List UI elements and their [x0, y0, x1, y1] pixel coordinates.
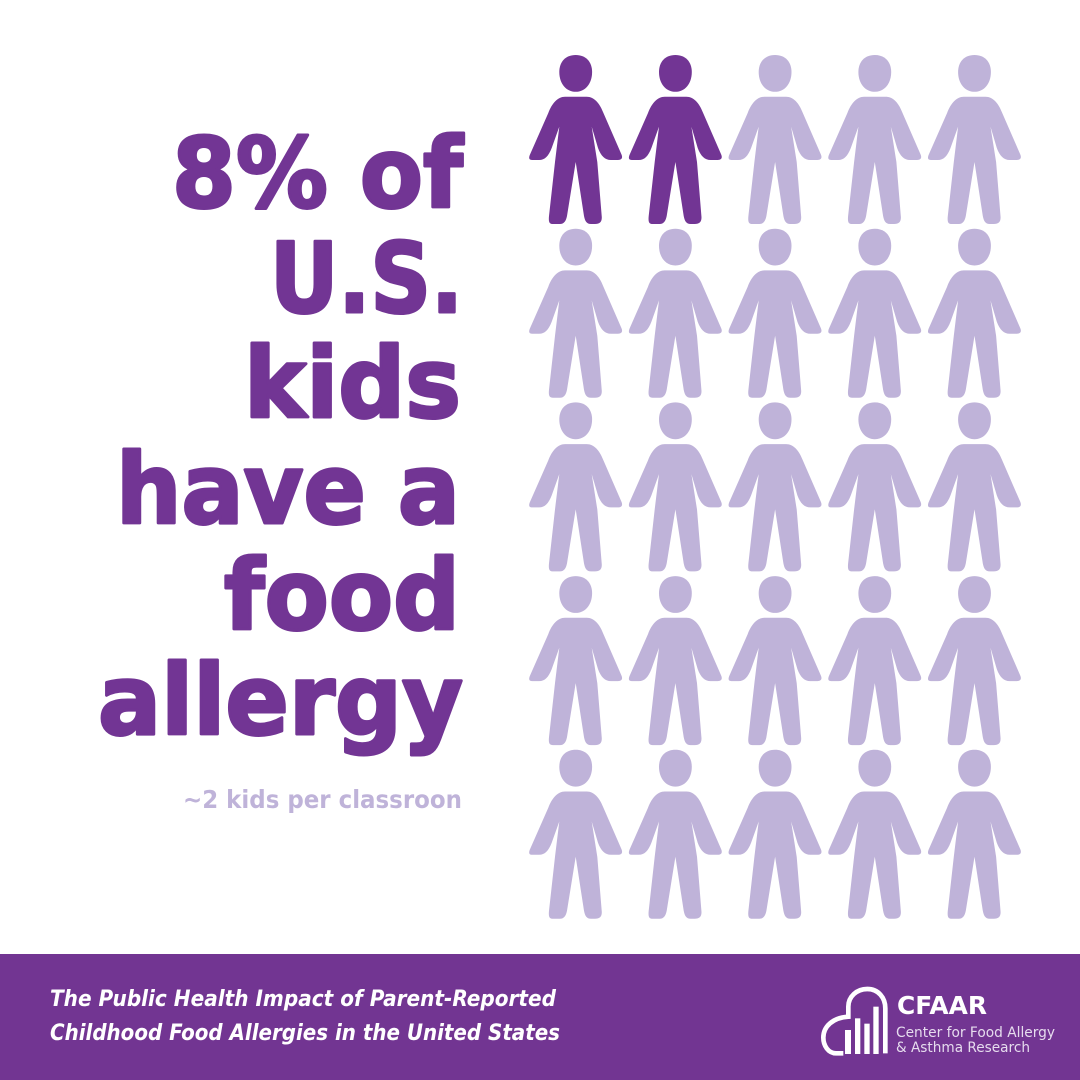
- title: have a: [116, 433, 460, 546]
- title: food: [224, 539, 460, 652]
- footer citation: Childhood Food Allergies in the United States: [50, 1021, 560, 1046]
- logo full name: & Asthma Research: [896, 1040, 1030, 1056]
- title: [98, 117, 465, 757]
- title: allergy: [98, 644, 463, 757]
- subtitle: ~2 kids per classroon: [183, 785, 462, 814]
- footer citation: [50, 987, 560, 1046]
- footer citation: The Public Health Impact of Parent-Reported: [50, 987, 556, 1012]
- logo icon: cloud with bars: [823, 989, 885, 1054]
- title: 8% of: [172, 117, 465, 230]
- logo full name: Center for Food Allergy: [896, 1025, 1055, 1041]
- logo: CFAAR: [823, 989, 1055, 1056]
- title: kids: [244, 327, 461, 440]
- pictogram: 2 of 25 kids highlighted: [529, 55, 1021, 919]
- logo full name: [896, 1025, 1055, 1056]
- highlighted kids: [529, 55, 722, 224]
- title: U.S.: [270, 222, 463, 335]
- remaining kids: [529, 55, 1021, 919]
- footer band: [0, 954, 1080, 1080]
- logo wordmark: CFAAR: [897, 991, 987, 1020]
